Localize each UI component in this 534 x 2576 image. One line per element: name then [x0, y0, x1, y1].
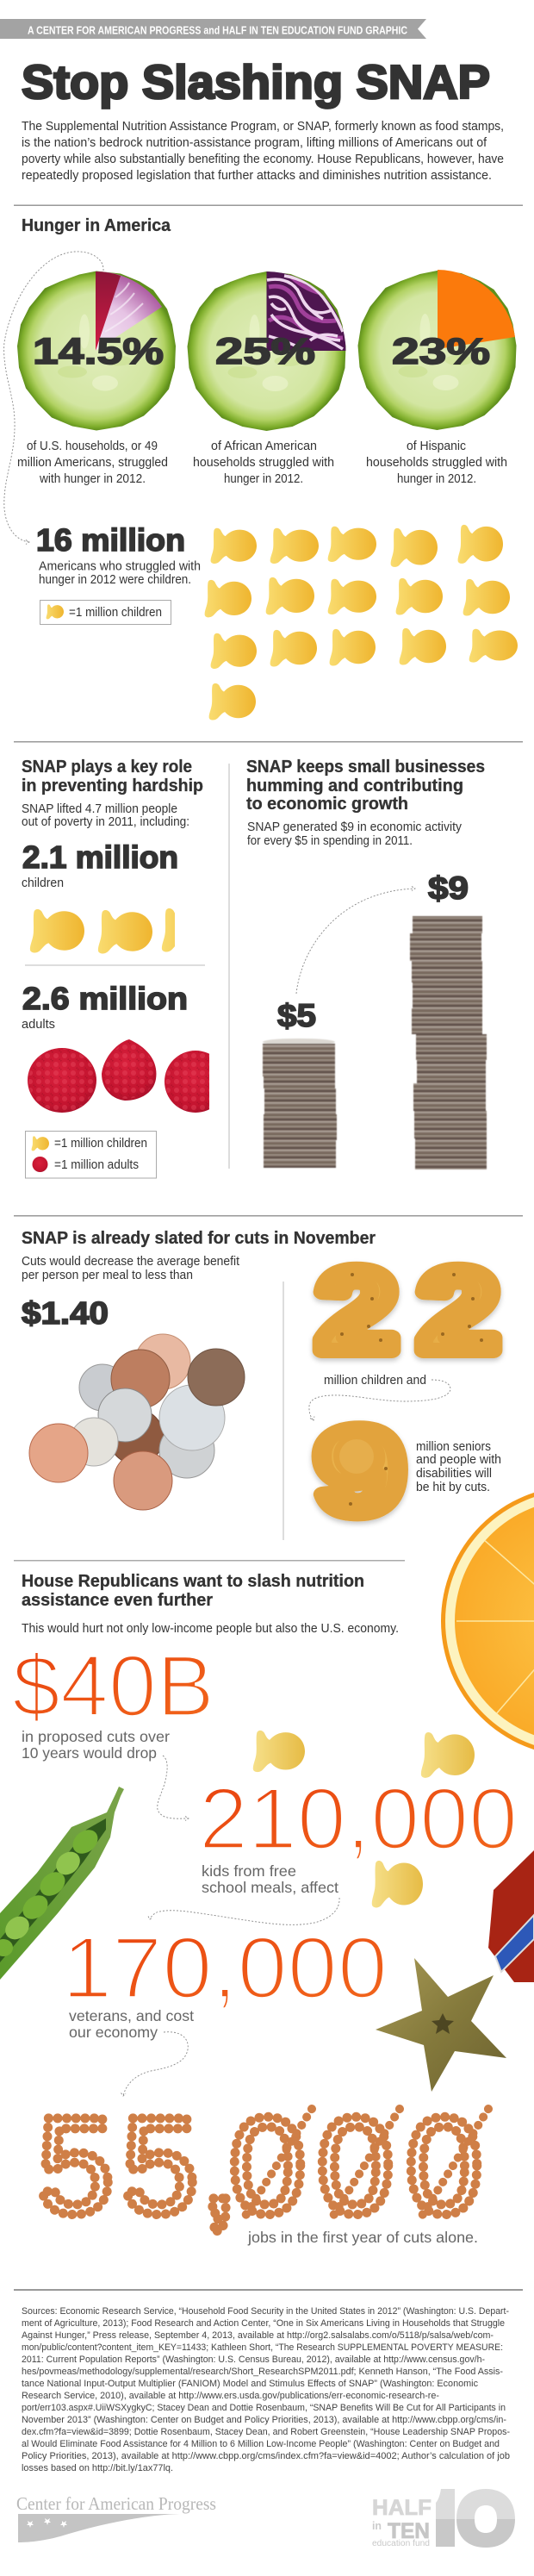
icons: pale fish crackers	[253, 1731, 475, 1907]
caption: African American households	[193, 440, 334, 486]
text: kids from free: kids from free	[202, 1862, 296, 1880]
text: million children and: million children and	[324, 1374, 426, 1388]
text: SNAP generated: for every $5 in spending in 2011.	[247, 834, 413, 848]
logo: Center for American Progress	[16, 2493, 216, 2542]
sources: dex.cfm?fa=view&id=3899; Dottie Rosenbaum, Stacey Dean, and Robert Greenstein, “House Leadership SNAP Propos-	[22, 2427, 510, 2437]
text: million seniors: and people with	[416, 1453, 501, 1467]
ketchup figure: 210,000: 210,000	[199, 1771, 518, 1868]
legend: 1 million children: =1 million children	[69, 606, 162, 620]
caption: African American households: households struggled with	[193, 456, 334, 470]
value: 25 percent: 25%	[215, 331, 315, 372]
panel: preventing hardship	[22, 758, 227, 1178]
text: Americans who struggled: hunger in 2012 were children.	[39, 573, 191, 587]
bead figure: 55,000: 55,000	[37, 2088, 482, 2242]
dotted arrow: to 170,000	[148, 1898, 339, 1924]
text: SNAP lifted	[22, 802, 189, 829]
text: veterans: our economy	[69, 2024, 158, 2041]
legend: children and adults: =1 million adults	[54, 1158, 139, 1172]
stat: 2.1 million children: 2.1 million	[22, 839, 178, 875]
dotted arrow: to 55,000	[121, 2032, 188, 2096]
stat: 2.6 million adults	[22, 981, 188, 1032]
sources: tance National Input-Output Multiplier (FANIOM) Model and Stimulus Effects of SNAP” (Washington: Economic	[22, 2379, 478, 2389]
text: cuts would decrease: per person per meal to less than	[22, 1269, 193, 1282]
pie: 23 percent	[358, 270, 517, 430]
text: SNAP generated	[247, 820, 463, 848]
banner: A CENTER FOR AMERICAN PROGRESS and HALF IN TEN EDUCATION FUND GRAPHIC	[28, 24, 407, 36]
banner	[0, 19, 426, 39]
heading: House Republicans	[22, 1572, 364, 1610]
numeral: 9 cracker: 9	[316, 1403, 404, 1538]
stat: 2.6 million adults: adults	[22, 1018, 55, 1032]
text: million seniors	[416, 1440, 501, 1494]
text: SNAP lifted: SNAP lifted 4.7 million people	[22, 802, 177, 816]
caption: U.S. households: million Americans, struggled	[17, 456, 168, 470]
logo: Half in Ten education fund: TEN	[388, 2519, 430, 2543]
image: bronze star medal	[376, 1850, 534, 2092]
sources: Research Service, 2010), available at http://www.ers.usda.gov/publications/err-economic-research-re-	[22, 2391, 439, 2401]
dotted arrow: 5 to 9 dollars	[296, 886, 415, 994]
heading: House Republicans: assistance even further	[22, 1591, 213, 1610]
legend: children and adults: =1 million children	[54, 1137, 147, 1151]
image: pea pod	[0, 1787, 124, 1980]
panel: November cuts	[22, 1229, 501, 1540]
text: jobs: jobs in the first year of cuts alone.	[247, 2229, 478, 2246]
stat: 16 million: 16 million	[36, 522, 185, 558]
logo: Half in Ten education fund: HALF	[372, 2496, 432, 2520]
text: in proposed cuts: 10 years would drop	[22, 1744, 157, 1762]
caption: U.S. households: with hunger in 2012.	[39, 472, 146, 486]
text: Americans who struggled: Americans who struggled with	[39, 560, 201, 574]
panel: small businesses	[246, 758, 487, 1169]
value: 23 percent: 23%	[392, 331, 490, 372]
dotted connector	[309, 1380, 450, 1420]
dotted arrow: to 210,000	[158, 1756, 189, 1820]
numeral: 22 crackers: 2	[317, 1245, 397, 1375]
panel: House Republicans	[0, 1572, 534, 2246]
sources: port/err103.aspx#.UiiWSXygkyC; Stacey Dean and Dottie Rosenbaum, “SNAP Benefits Will Be Cut for All Participants in	[22, 2403, 506, 2413]
pie: 25 percent	[188, 271, 346, 431]
sources: November 2013” (Washington: Center on Budget and Policy Priorities, 2013), available at http://www.cbpp.org/cms/in-	[22, 2415, 506, 2425]
numeral: 22 crackers	[317, 1245, 499, 1375]
text: in proposed cuts: in proposed cuts over	[22, 1728, 170, 1745]
ketchup figure: 40 billion dollars: $40B	[12, 1638, 214, 1735]
sources: Against Hunger,” Press release, September 4, 2013, available at http://org2.salsalabs.com/o/5118/p/salsa/web/com-	[22, 2330, 494, 2341]
sources: ment of Agriculture, 2013); Food Research and Action Center, “One in Six Americans Living in Households that Struggle	[22, 2318, 505, 2329]
ketchup figure: 170,000: 170,000	[62, 1920, 388, 2017]
title: Stop Slashing SNAP	[22, 55, 490, 109]
caption: U.S. households: of U.S. households, or 49	[27, 440, 158, 453]
heading: preventing hardship: SNAP plays a key role	[22, 758, 192, 777]
coin stack: 9 dollars	[410, 916, 487, 1169]
caption: African American households: of African American	[211, 440, 317, 453]
value: 5 dollars: $5	[277, 998, 316, 1033]
text: Americans who struggled	[39, 560, 201, 587]
heading: small businesses: humming and contributing	[246, 777, 463, 795]
caption: U.S. households	[17, 440, 168, 486]
caption: African American households: hunger in 2012.	[224, 472, 303, 486]
numeral: 22 crackers: 2	[419, 1245, 499, 1375]
image: orange slice	[441, 1486, 534, 1756]
heading: small businesses: to economic growth	[246, 795, 408, 814]
caption: Hispanic households	[366, 440, 507, 486]
caption: Hispanic households: households struggled with	[366, 456, 507, 470]
intro text	[22, 119, 504, 183]
logo: Half in Ten education fund	[372, 2489, 515, 2548]
logo: Half in Ten education fund: in	[372, 2519, 382, 2532]
sources: mon/public/content?content_item_KEY=11433; Kathleen Short, “The Research SUPPLEMENTAL POVERTY MEASURE:	[22, 2342, 503, 2353]
heading: November cuts: SNAP is already slated for cuts in November	[22, 1229, 376, 1248]
dotted arrow to 16 million	[4, 252, 103, 545]
text: veterans: veterans, and cost	[69, 2007, 194, 2024]
value: 14.5 percent: 14.5%	[33, 331, 164, 372]
text: cuts would decrease	[22, 1255, 239, 1282]
pie: 14.5 percent	[17, 271, 176, 431]
text: kids from free	[202, 1862, 338, 1896]
panel: hunger in America	[4, 216, 518, 720]
image: pile of coins	[29, 1334, 245, 1510]
sources: Policy Priorities, 2013), available at http://www.cbpp.org/cms/index.cfm?fa=view&id=4002; Author’s calculation of job	[22, 2451, 510, 2461]
stat: 2.1 million children	[22, 839, 178, 890]
text: million seniors: be hit by cuts.	[416, 1481, 490, 1494]
heading: small businesses	[246, 758, 485, 814]
icons: children crackers	[29, 908, 175, 953]
text: kids from free: school meals, affect	[202, 1879, 338, 1896]
icons: adult raspberries	[28, 1039, 227, 1113]
intro text: repeatedly proposed legislation that further attacks and diminishes nutrition assistance.	[22, 168, 492, 183]
intro text: poverty while also substantially benefiting the economy. House Republicans, however, have	[22, 152, 504, 166]
logo: Half in Ten education fund: education fund	[372, 2539, 430, 2548]
text: this would hurt: This would hurt not only low-income people but also the U.S. economy.	[22, 1622, 399, 1636]
heading: House Republicans: House Republicans want to slash nutrition	[22, 1572, 364, 1591]
coin stack: 5 dollars	[263, 1039, 337, 1168]
legend: children and adults	[26, 1131, 157, 1178]
heading: preventing hardship	[22, 758, 203, 795]
heading: small businesses: SNAP keeps small businesses	[246, 758, 485, 777]
text: SNAP lifted: out of poverty in 2011, including:	[22, 815, 189, 829]
stat: 2.6 million adults: 2.6 million	[22, 981, 188, 1016]
text: in proposed cuts	[22, 1728, 170, 1762]
sources: al Would Eliminate Food Assistance for 4 Million to 6 Million Low-Income People” (Washington: Center on Budget and	[22, 2439, 500, 2449]
sources: Sources: Economic Research Service, “Household Food Security in the United States in 2012” (Washington: U.S. Depart-	[22, 2306, 509, 2317]
stat: 1.40 dollars: $1.40	[22, 1295, 109, 1331]
heading: preventing hardship: in preventing hardship	[22, 777, 203, 795]
caption: Hispanic households: of Hispanic	[407, 440, 466, 453]
text: cuts would decrease: Cuts would decrease the average benefit	[22, 1255, 239, 1269]
sources: losses based on http://bit.ly/1ax77lq.	[22, 2463, 173, 2473]
text: million seniors: disabilities will	[416, 1467, 492, 1481]
text: veterans	[69, 2007, 194, 2041]
legend: 1 million children	[40, 600, 171, 624]
heading: hunger in America: Hunger in America	[22, 216, 171, 235]
icon array: 16 fish crackers	[205, 525, 518, 720]
logo: Center for American Progress: Center for American Progress	[16, 2493, 216, 2514]
sources	[22, 2306, 510, 2473]
value: 9 dollars: $9	[428, 870, 469, 906]
stat: 2.1 million children: children	[22, 876, 64, 890]
text: SNAP generated: SNAP generated $9 in economic activity	[247, 820, 463, 834]
caption: Hispanic households: hunger in 2012.	[397, 472, 476, 486]
sources: hes/povmeas/methodology/supplemental/research/Short_ResearchSPM2011.pdf; Kenneth Hanson, “The Food Assis-	[22, 2367, 503, 2377]
intro text: is the nation’s bedrock nutrition-assistance program, lifting millions of Americans out of	[22, 135, 487, 150]
sources: 2011: Current Population Reports” (Washington: U.S. Census Bureau, 2012), available at http://www.census.gov/h-	[22, 2355, 485, 2365]
text: million seniors: million seniors	[416, 1440, 491, 1454]
intro text: The Supplemental Nutrition Assistance Program, or SNAP, formerly known as food stamps,	[22, 119, 504, 134]
